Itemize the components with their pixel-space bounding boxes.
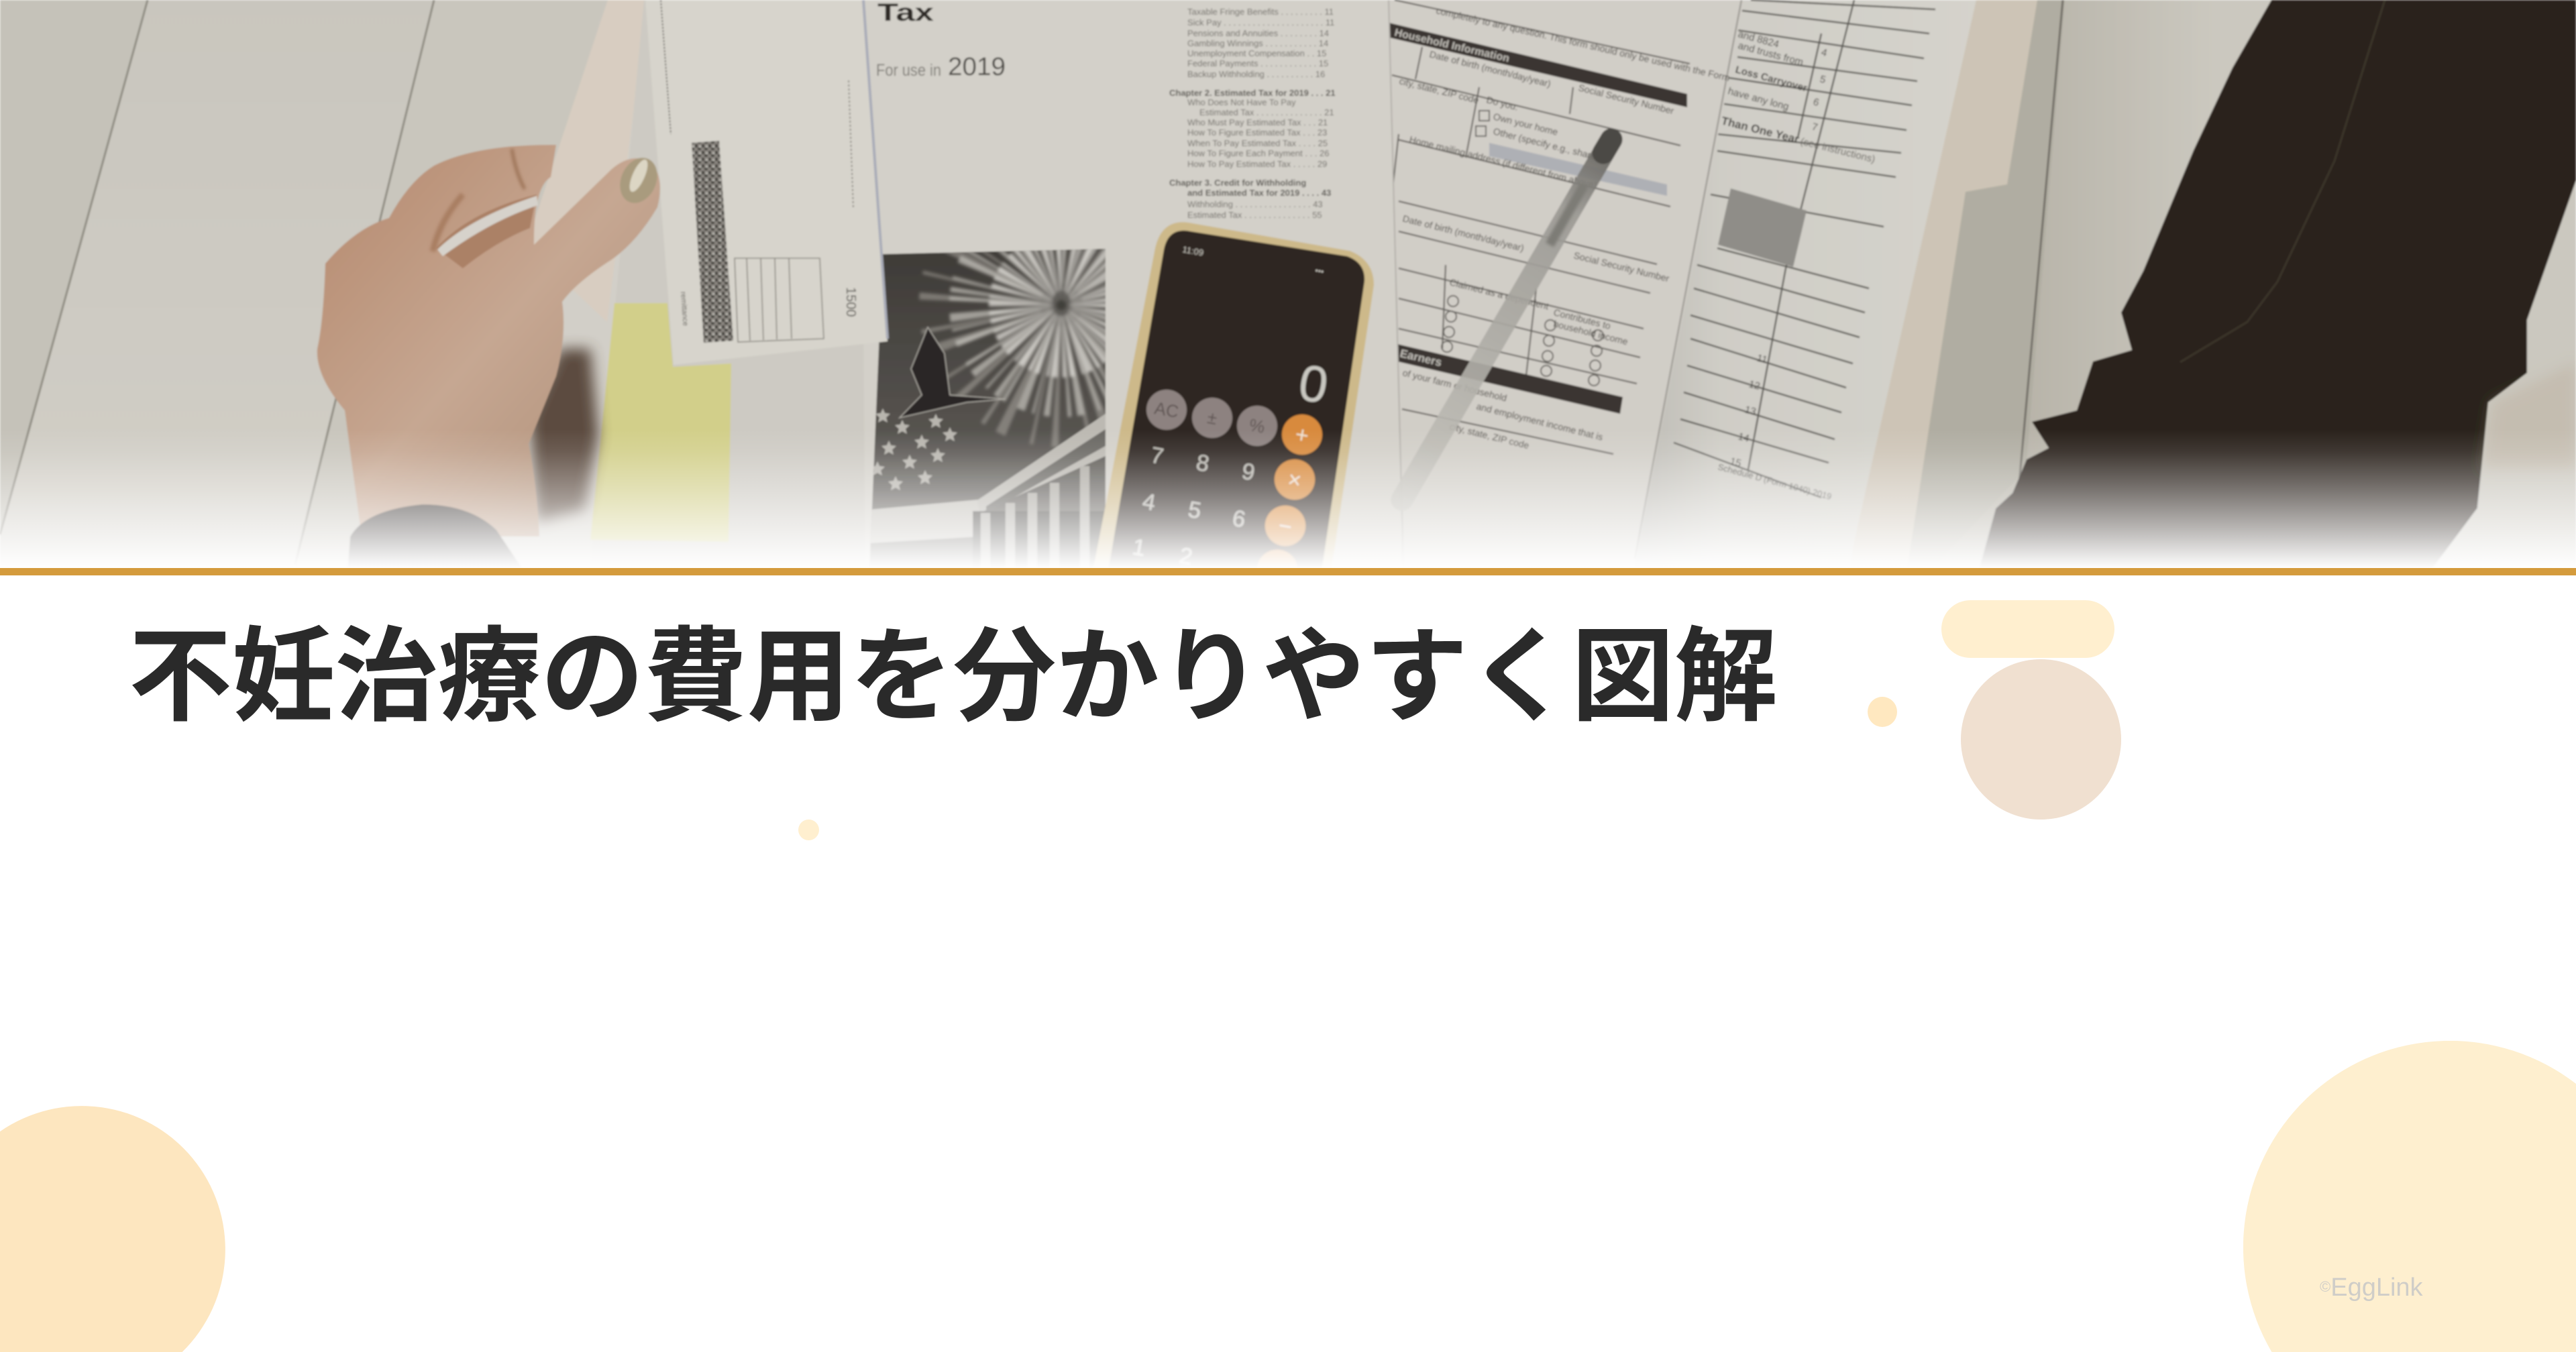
calculator phone: ••• <box>1314 266 1324 276</box>
decoration: large circle bottom left <box>0 1106 225 1352</box>
booklet table of contents: Pensions and Annuities . . . . . . . . 14 <box>1187 28 1329 38</box>
booklet year: 2019 <box>948 53 1006 81</box>
folder and second form page: 12 <box>1748 378 1761 392</box>
calculator buttons: AC <box>1153 398 1180 422</box>
first form page: Date of birth (month/day/year) <box>1428 48 1552 89</box>
calculator buttons: 7 <box>1148 443 1165 469</box>
payment slip envelope: remittance <box>679 291 690 326</box>
calculator buttons: 8 <box>1194 450 1211 477</box>
calculator buttons: 6 <box>1230 506 1247 532</box>
folder and second form page: 13 <box>1743 404 1757 418</box>
booklet table of contents: Backup Withholding . . . . . . . . . . 16 <box>1187 69 1325 79</box>
booklet table of contents: Sick Pay . . . . . . . . . . . . . . . . . . . . . 11 <box>1187 17 1334 27</box>
calculator buttons: % <box>1248 414 1267 437</box>
hand holding papers <box>317 145 664 537</box>
booklet year: For use in <box>876 61 941 80</box>
booklet table of contents: Chapter 2. Estimated Tax for 2019 . . . 21 <box>1169 88 1336 98</box>
folder and second form page: 6 <box>1812 96 1820 109</box>
first form page: Earners <box>1399 347 1443 369</box>
folder and second form page: and trusts from <box>1737 40 1805 68</box>
first form page: Do you: <box>1485 94 1519 113</box>
booklet table of contents: How To Figure Estimated Tax . . . 23 <box>1187 127 1327 137</box>
booklet table of contents: Federal Payments . . . . . . . . . . . . 15 <box>1187 58 1328 68</box>
booklet table of contents: Taxable Fringe Benefits . . . . . . . . . 11 <box>1187 7 1334 17</box>
booklet table of contents: Estimated Tax . . . . . . . . . . . . . . 21 <box>1199 107 1334 117</box>
calculator buttons: ± <box>1205 407 1219 429</box>
barcode <box>692 141 733 343</box>
folder and second form page: Schedule D (Form 1040) 2019 <box>1717 461 1833 502</box>
calculator buttons <box>1133 388 1324 563</box>
dark trouser leg <box>1979 0 2576 569</box>
first form page: of your farm or household <box>1401 367 1508 404</box>
first form page: Claimed as a dependent <box>1448 276 1550 312</box>
booklet table of contents: Estimated Tax . . . . . . . . . . . . . . 55 <box>1187 210 1322 220</box>
first form page: Home mailing address (if different from above) <box>1408 133 1598 191</box>
booklet table of contents: Unemployment Compensation . . 15 <box>1187 48 1326 58</box>
gold divider line <box>0 568 2576 575</box>
booklet table of contents: Chapter 3. Credit for Withholding <box>1169 178 1306 188</box>
booklet cover picture: fireworks, eagle, flag and capitol <box>871 248 1107 561</box>
first form page: household income <box>1552 318 1629 347</box>
photo banner: tax forms, hand, calculator phone and pen on a wooden table <box>0 0 2576 565</box>
calculator buttons: 9 <box>1240 459 1256 486</box>
decoration: large circle bottom right <box>2243 1041 2576 1352</box>
calculator buttons: 1 <box>1130 534 1147 561</box>
shadow beside the hand <box>530 349 598 523</box>
booklet table of contents: Who Does Not Have To Pay <box>1187 97 1296 107</box>
payment slip envelope <box>645 0 888 365</box>
dark form header bars <box>1389 23 1687 107</box>
calculator phone <box>1093 222 1374 590</box>
booklet table of contents: How To Pay Estimated Tax . . . . . 29 <box>1187 159 1327 169</box>
folder and second form page: 7 <box>1811 121 1819 133</box>
first form page: completely to any question. This form should only be used with the Form <box>1435 5 1731 83</box>
first form page: city, state, ZIP code <box>1398 75 1480 105</box>
white fade at bottom of photo <box>0 429 2576 569</box>
first form page <box>1389 0 1744 569</box>
calculator buttons: 4 <box>1140 489 1157 516</box>
decoration: small dot right <box>1868 697 1897 727</box>
calculator buttons: − <box>1277 513 1294 540</box>
folder and second form page: 5 <box>1819 73 1827 86</box>
folder and second form page: Than One Year <box>1720 114 1801 146</box>
booklet table of contents: Who Must Pay Estimated Tax . . . 21 <box>1187 117 1328 127</box>
booklet table of contents: Withholding . . . . . . . . . . . . . . . . 43 <box>1187 199 1323 209</box>
booklet table of contents: When To Pay Estimated Tax . . . . 25 <box>1187 138 1328 148</box>
table background planks <box>0 0 2576 569</box>
folder and second form page: 11 <box>1756 352 1768 366</box>
booklet table of contents <box>1169 7 1336 220</box>
booklet year <box>876 53 1006 81</box>
decoration: beige circle <box>1961 659 2121 820</box>
calculator display zero: 0 <box>1295 354 1332 414</box>
grey shaded cell on second form <box>1718 188 1807 267</box>
tax booklet page <box>861 0 1403 571</box>
calculator phone: 11:09 <box>1181 244 1204 258</box>
booklet table of contents: and Estimated Tax for 2019 . . . . 43 <box>1187 188 1331 198</box>
underlying paper layers <box>470 0 879 569</box>
first form page: Own your home <box>1492 111 1559 137</box>
yellow sticky note <box>590 303 731 542</box>
booklet table of contents: How To Figure Each Payment . . . 26 <box>1187 148 1329 158</box>
first form page: Contributes to <box>1552 306 1612 331</box>
first form page: Other (specify e.g., share <box>1492 125 1597 162</box>
warm light at lower right <box>2482 362 2576 469</box>
first form page: Household Information <box>1393 27 1511 64</box>
folder and second form page: have any long <box>1727 85 1790 113</box>
title: 不妊治療の費用を分かりやすく図解 <box>129 619 1778 734</box>
calculator buttons: + <box>1293 422 1311 449</box>
folder and second form page <box>1610 0 2065 569</box>
decoration: pill <box>1941 600 2114 658</box>
first form page: Social Security Number <box>1572 249 1670 284</box>
first form page: Date of birth (month/day/year) <box>1401 213 1525 253</box>
first form page: Social Security Number <box>1577 82 1675 116</box>
wall at right behind folder <box>1878 0 2576 569</box>
folder and second form page: 14 <box>1737 431 1750 445</box>
calculator buttons: 5 <box>1186 497 1203 524</box>
folder and second form page: 4 <box>1820 46 1828 59</box>
folder and second form page: 15 <box>1729 455 1742 469</box>
payment slip envelope: 1500 <box>843 287 858 317</box>
folder and second form page: and 8824 <box>1737 28 1780 50</box>
calculator buttons: × <box>1286 467 1303 494</box>
first form page: city, state, ZIP code <box>1448 420 1530 451</box>
shirt cuff <box>347 504 523 569</box>
decoration: small dot middle <box>798 820 819 840</box>
booklet table of contents: Gambling Winnings . . . . . . . . . . . 14 <box>1187 38 1328 48</box>
copyright watermark: ©EggLink <box>2320 1274 2423 1302</box>
first form page: and employment income that is <box>1475 400 1604 443</box>
folder and second form page: Loss Carryover <box>1734 64 1809 94</box>
pen <box>1402 139 1611 500</box>
folder and second form page: (see instructions) <box>1799 135 1876 166</box>
